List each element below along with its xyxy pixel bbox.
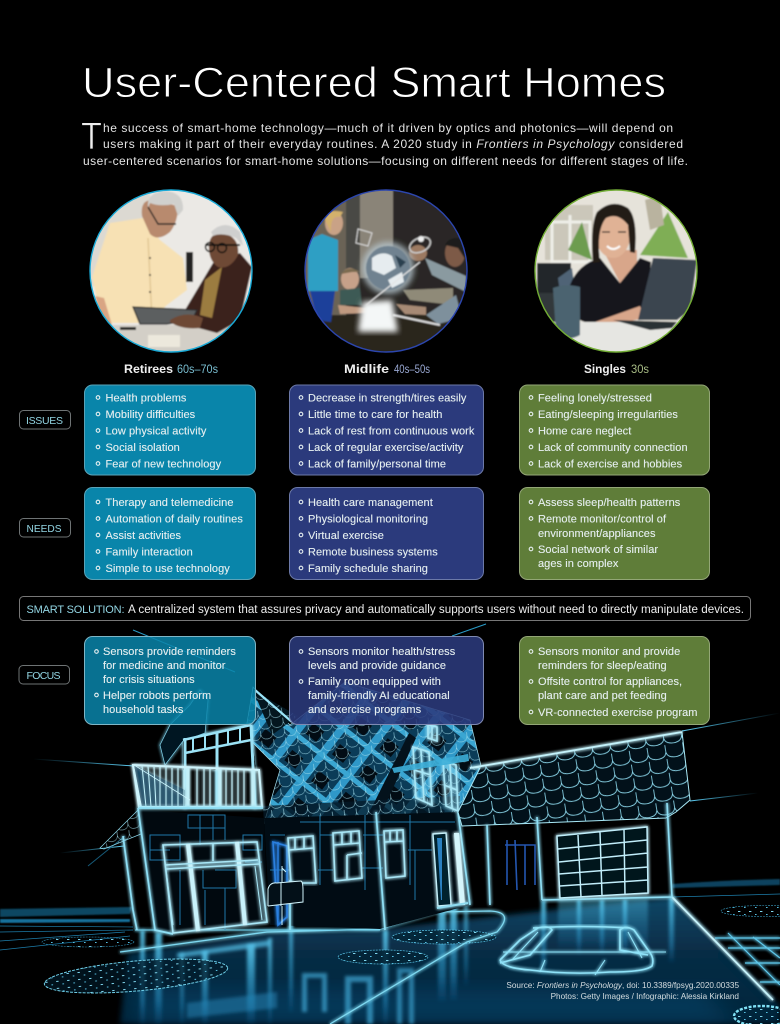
panel: singles needs: Assess sleep/health patterns [538, 497, 681, 509]
upper balcony windows [160, 690, 256, 808]
gable crossbeam [392, 754, 469, 773]
label: issues [20, 410, 70, 429]
illustration: wireframe smart house [0, 624, 780, 1024]
panel: singles focus: Sensors monitor and provide [538, 646, 680, 658]
light rays [33, 624, 780, 866]
panel: retirees focus: Helper robots perform [103, 690, 211, 702]
age: Retirees: 60s–70s [177, 364, 218, 376]
age: Midlife: 40s–50s [394, 364, 430, 376]
panel: retirees focus: for medicine and monitor [103, 660, 226, 672]
smart solution banner: SMART SOLUTION: [26, 604, 124, 616]
main gable roof [245, 682, 482, 823]
panel: midlife focus: family-friendly AI educational [308, 690, 450, 702]
balcony railing [133, 765, 262, 807]
panel: retirees needs: Family interaction [106, 546, 193, 558]
source credits: Photos: Getty Images / Infographic: Alessia Kirkland [551, 992, 739, 1001]
photo: singles [533, 188, 699, 354]
panel: singles focus [520, 636, 710, 724]
panel: singles focus: Offsite control for appliances, [538, 676, 682, 688]
panel: midlife focus: and exercise programs [308, 704, 422, 716]
panel: midlife issues [290, 385, 484, 475]
panel: singles needs: environment/appliances [538, 528, 656, 540]
panel: singles focus: VR-connected exercise program [538, 707, 697, 719]
gable windows [413, 725, 458, 811]
panel: midlife focus: Family room equipped with [308, 676, 441, 688]
ground horizon streaks and planting beds [0, 879, 780, 950]
floor glow and reflections [43, 897, 780, 1024]
panel: retirees needs [84, 488, 256, 580]
source credits [506, 981, 739, 1001]
panel: retirees issues: Social isolation [106, 442, 180, 454]
car outline [500, 926, 666, 975]
panel: retirees issues: Health problems [106, 392, 187, 404]
panel: midlife focus: levels and provide guidance [308, 660, 446, 672]
panel: midlife needs: Physiological monitoring [308, 514, 428, 526]
label: needs: NEEDS [26, 523, 62, 535]
panel: retirees needs: Therapy and telemedicine [106, 497, 234, 509]
column heading: Retirees: Retirees [124, 362, 173, 376]
intro text: users making it part of their everyday routines. A 2020 study in Frontiers in Psychology considered [103, 137, 683, 151]
garage walls [487, 803, 672, 905]
age: Singles: 30s [631, 364, 649, 376]
panel: singles needs: ages in complex [538, 558, 619, 570]
panel: midlife issues: Lack of regular exercise/activity [308, 442, 464, 454]
panel: retirees focus: Sensors provide reminders [103, 646, 236, 658]
intro text: he success of smart-home technology—much of it driven by optics and photonics—will depend on [103, 121, 673, 135]
front wall structure [123, 808, 470, 934]
label: focus [19, 666, 70, 684]
panel: midlife focus [290, 636, 484, 724]
panel: midlife needs [290, 488, 484, 580]
panel: retirees issues: Fear of new technology [106, 458, 222, 470]
label: issues: ISSUES [26, 415, 63, 427]
panel: singles issues: Lack of community connection [538, 442, 688, 454]
photo: midlife [303, 188, 469, 355]
porch roof [100, 810, 141, 849]
front door [433, 833, 468, 908]
title: User-Centered Smart Homes [82, 59, 666, 107]
panel: retirees issues [84, 385, 256, 475]
source credits: Source: Frontiers in Psychology, doi: 10.3389/fpsyg.2020.00335 [506, 981, 739, 990]
panel: retirees needs: Assist activities [106, 530, 182, 542]
panel: singles issues: Eating/sleeping irregularities [538, 409, 678, 421]
panel: singles needs: Remote monitor/control of [538, 514, 667, 526]
panel: retirees focus: household tasks [103, 704, 184, 716]
panel: midlife focus: Sensors monitor health/stress [308, 646, 456, 658]
smart solution banner: A centralized system that assures privacy and automatically supports users without need to directly manipulate devices. [128, 604, 744, 616]
french doors [163, 842, 267, 933]
panel: retirees focus [84, 636, 256, 724]
intro text [81, 116, 688, 168]
panel: retirees issues: Mobility difficulties [106, 409, 196, 421]
panel: midlife needs: Family schedule sharing [308, 563, 428, 575]
intro text: T [81, 116, 102, 158]
panel: retirees needs: Simple to use technology [106, 563, 230, 575]
smart solution banner [20, 596, 750, 620]
panel: midlife needs: Remote business systems [308, 546, 438, 558]
column heading: Midlife: Midlife [344, 362, 389, 376]
panel: retirees issues: Low physical activity [106, 426, 207, 438]
panel: midlife needs: Health care management [308, 497, 433, 509]
panel: retirees needs: Automation of daily routines [106, 514, 243, 526]
garage door [557, 827, 648, 898]
panel: singles needs: Social network of similar [538, 544, 658, 556]
panel: midlife needs: Virtual exercise [308, 530, 384, 542]
panel: retirees focus: for crisis situations [103, 674, 195, 686]
photo: retirees [88, 188, 256, 355]
panel: singles issues: Home care neglect [538, 426, 631, 438]
panel: singles issues: Feeling lonely/stressed [538, 392, 652, 404]
mailbox [268, 866, 303, 925]
panel: singles focus: reminders for sleep/eating [538, 660, 667, 672]
panel: midlife issues: Decrease in strength/tires easily [308, 392, 467, 404]
panel: singles needs [520, 488, 710, 580]
label: focus: FOCUS [26, 670, 60, 682]
garage wing roof [458, 732, 690, 826]
panel: midlife issues: Little time to care for health [308, 409, 442, 421]
panel: singles issues: Lack of exercise and hobbies [538, 458, 683, 470]
panel: singles focus: plant care and pet feeding [538, 690, 667, 702]
column heading: Singles: Singles [584, 362, 626, 376]
intro text: user-centered scenarios for smart-home solutions—focusing on different needs for different stages of life. [83, 154, 688, 168]
panel: midlife issues: Lack of family/personal time [308, 458, 446, 470]
panel: singles issues [520, 385, 710, 475]
panel: midlife issues: Lack of rest from continuous work [308, 426, 475, 438]
label: needs [20, 518, 70, 537]
front windows [288, 830, 405, 883]
